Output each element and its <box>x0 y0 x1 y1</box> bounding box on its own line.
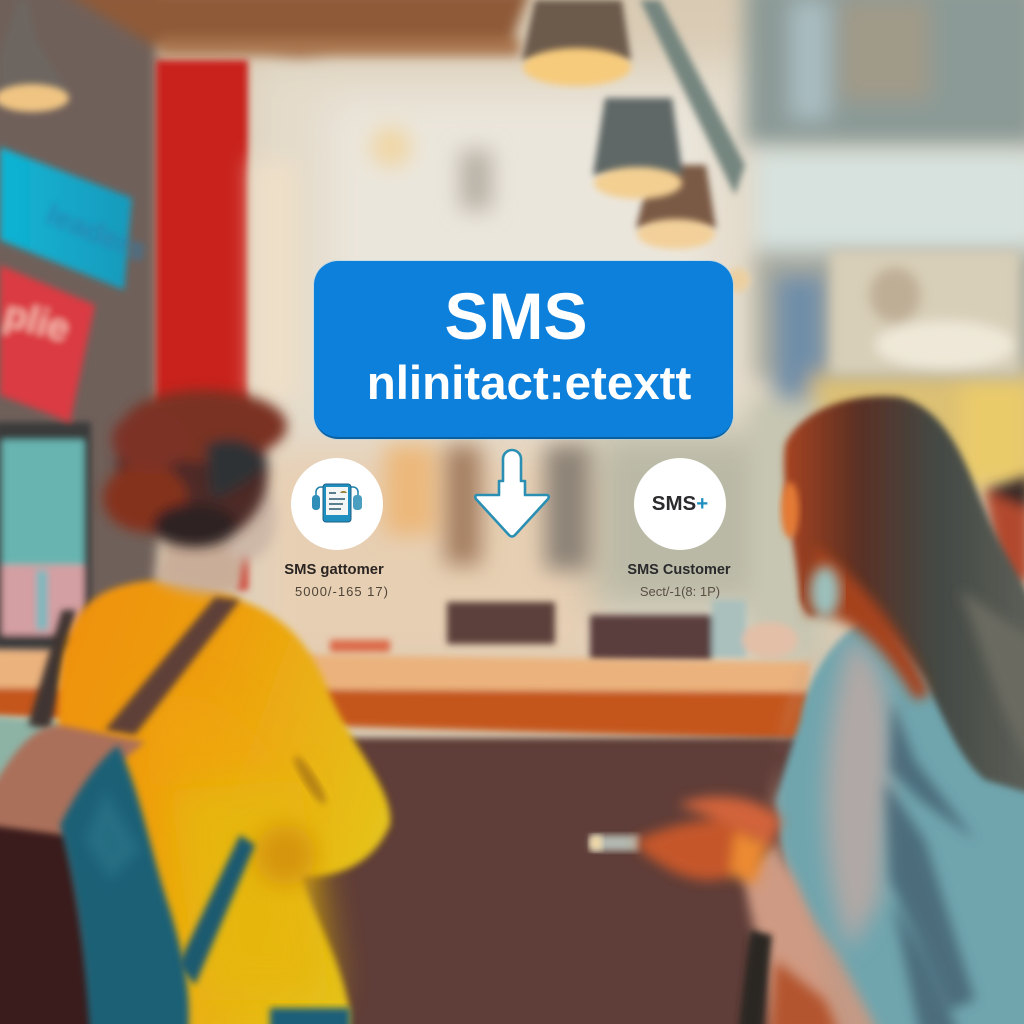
face <box>222 478 276 562</box>
back counter boxes <box>447 600 798 661</box>
icon: SMS+ badge <box>634 458 726 550</box>
hair red strand <box>805 545 930 700</box>
heading: SMS: SMS <box>444 279 588 353</box>
right label <box>627 562 731 599</box>
counter <box>0 640 810 740</box>
left signs and screen: leaders <box>41 198 151 268</box>
arrow: down <box>474 448 550 538</box>
panel background <box>314 261 733 439</box>
lower sweater yellow <box>170 780 330 1000</box>
counter front <box>0 716 820 1024</box>
backpack top tan <box>0 725 145 835</box>
label subtitle: Sect/-1(8: 1P) <box>640 584 720 599</box>
bag strap <box>738 930 772 1024</box>
lower arm <box>745 861 835 1024</box>
ceiling <box>60 0 530 58</box>
shirt folds <box>885 700 975 1024</box>
cuff and hand <box>255 825 315 885</box>
right background <box>745 0 1024 660</box>
hair grey strand <box>960 590 1024 770</box>
back wall details <box>252 127 590 570</box>
pendant lamps <box>0 0 750 292</box>
blue title panel <box>313 260 734 440</box>
sleeve tan <box>752 645 880 1024</box>
backpack strap left <box>28 610 76 730</box>
jeans <box>270 1008 350 1024</box>
icon: customer document badge <box>291 458 383 550</box>
phone <box>590 835 640 851</box>
sweater shading <box>150 695 300 800</box>
bag strap <box>105 597 240 735</box>
hands <box>636 797 782 885</box>
left woman <box>0 390 390 1024</box>
label subtitle: 5000/-165 17) <box>295 584 389 599</box>
hair <box>784 396 1024 795</box>
yellow sweater <box>58 580 390 1024</box>
label title: SMS gattomer <box>284 562 384 578</box>
red column <box>156 60 248 590</box>
shirt <box>775 600 1024 1024</box>
right woman <box>590 396 1024 1024</box>
face <box>781 482 799 538</box>
TV screen <box>830 250 1020 374</box>
backpack dark <box>0 820 100 1024</box>
hair <box>103 390 287 547</box>
SMS+ text: SMS+ <box>652 492 708 515</box>
far person <box>985 475 1024 590</box>
left signs and screen <box>0 147 151 648</box>
subheading: nlinitact:etextt <box>367 357 691 410</box>
left wall <box>0 0 158 660</box>
arm crease <box>290 753 330 807</box>
backpack teal <box>60 745 189 1024</box>
left label <box>284 562 389 599</box>
label title: SMS Customer <box>627 562 731 578</box>
teal strap <box>178 835 255 985</box>
neck highlight <box>810 566 840 618</box>
sleeve pale blue <box>826 640 891 950</box>
neck <box>155 530 250 594</box>
left signs and screen: plie <box>0 293 74 351</box>
